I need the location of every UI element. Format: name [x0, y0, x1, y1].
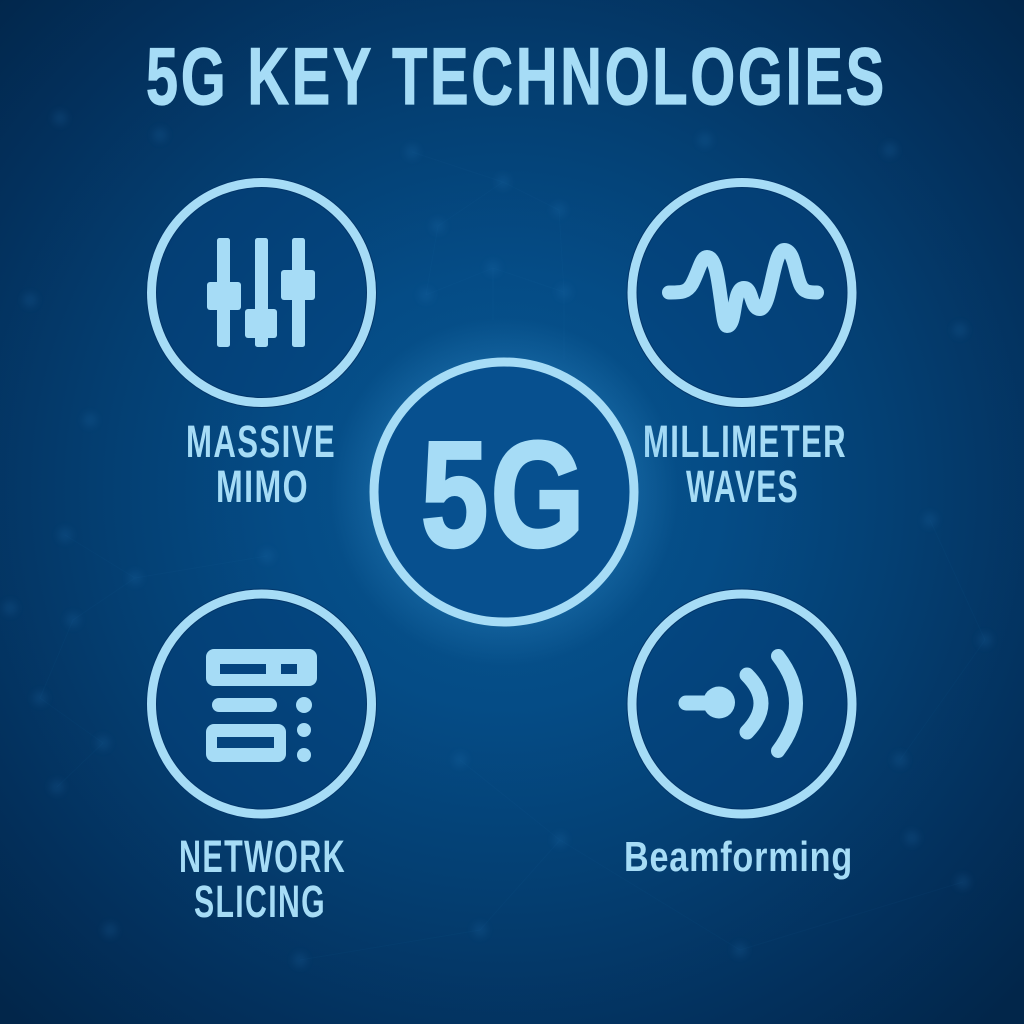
label: massive mimo: [186, 416, 336, 512]
icon: waveform: [669, 250, 817, 326]
label: massive mimo: MASSIVE: [186, 416, 336, 467]
label: millimeter waves: [643, 416, 847, 512]
label: massive mimo: MIMO: [216, 461, 309, 512]
panel: central 5G hub: [329, 317, 679, 667]
label: beamforming: Beamforming: [624, 833, 853, 880]
label: network slicing: [179, 831, 346, 927]
label: network slicing: SLICING: [194, 876, 326, 927]
icon: beam signal: [686, 656, 796, 751]
panel: massive mimo: [152, 182, 372, 402]
label: network slicing: NETWORK: [179, 831, 346, 882]
icon: sliders: [207, 238, 315, 347]
panel: millimeter waves: [632, 182, 852, 402]
panel: network slicing: [152, 594, 372, 814]
label: millimeter waves: WAVES: [686, 461, 799, 512]
icon: server stack: [206, 649, 317, 762]
label: millimeter waves: MILLIMETER: [643, 416, 847, 467]
central 5G text: 5G: [421, 410, 587, 578]
panel: beamforming: [632, 594, 852, 814]
